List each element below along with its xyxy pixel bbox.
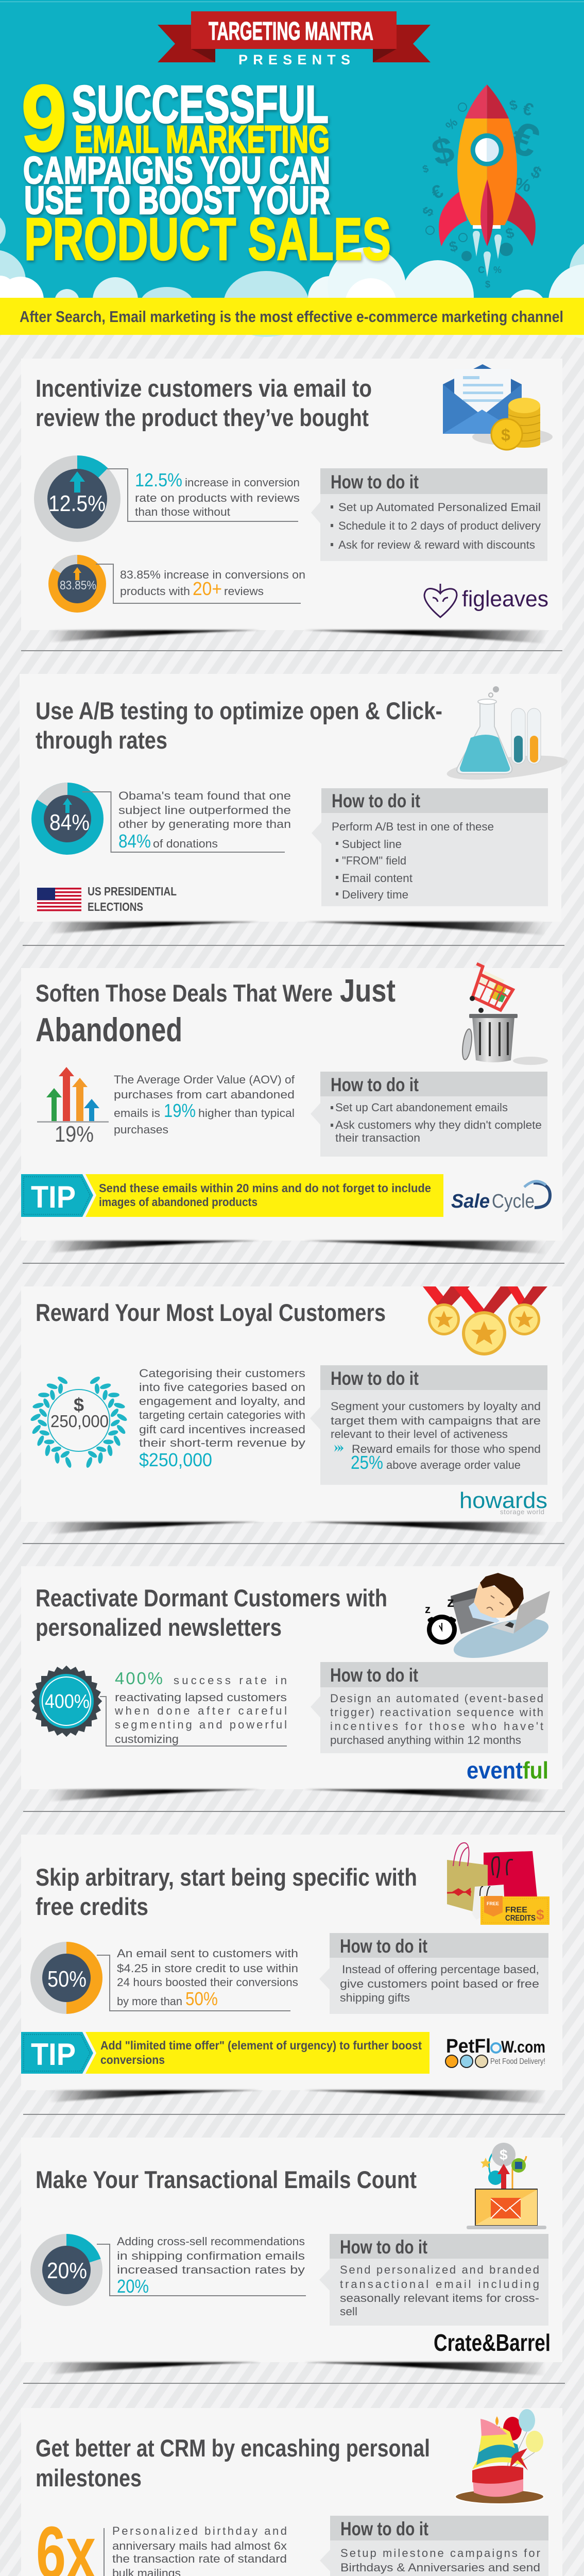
stat text: 84%: of donations bbox=[153, 837, 218, 850]
heading: Make Your Transactional Emails Count bbox=[36, 2166, 417, 2193]
how to do it: How to do it bbox=[340, 1936, 427, 1957]
panel 8: crm milestones bbox=[21, 2408, 562, 2576]
how to do it: give customers point based or free bbox=[340, 1977, 539, 1990]
stat: 83.85% donut bbox=[48, 555, 106, 613]
stat: 84% donut bbox=[31, 783, 104, 855]
how to do it: 25% bbox=[351, 1452, 383, 1473]
heading: Use A/B testing to optimize open & Click- bbox=[36, 697, 442, 724]
icon: shopping bags and coupon: FREE bbox=[505, 1906, 527, 1914]
how to do it bbox=[311, 468, 547, 561]
rocket background icons: $ bbox=[485, 279, 490, 290]
stat text: 83.85%: reviews bbox=[224, 585, 264, 598]
heading: Reactivate Dormant Customers with bbox=[36, 1584, 387, 1612]
tip bbox=[21, 1174, 443, 1217]
icon: shopping bags and coupon: CREDITS bbox=[505, 1914, 536, 1923]
logo: salecycle: Sale bbox=[451, 1191, 490, 1212]
how to do it bbox=[319, 2234, 548, 2326]
how to do it: purchased anything within 12 months bbox=[330, 1734, 521, 1747]
panel 5: dormant customers bbox=[21, 1566, 562, 1789]
badge: 400% bbox=[31, 1666, 102, 1737]
icon: cart in trash can bbox=[461, 964, 548, 1065]
logo: crate and barrel: Crate&Barrel bbox=[434, 2329, 551, 2356]
title bbox=[21, 65, 391, 273]
stat text: 12.5% bbox=[135, 469, 300, 518]
title: CAMPAIGNS YOU CAN bbox=[23, 149, 330, 192]
callout line bbox=[82, 792, 285, 852]
stat text: 50%: 24 hours boosted their conversions bbox=[117, 1976, 298, 1989]
heading bbox=[36, 375, 372, 431]
how to do it bbox=[319, 1933, 548, 2014]
stat text: 12.5%: than those without bbox=[135, 505, 230, 518]
laurel badge: $250,000: 250,000 bbox=[50, 1412, 109, 1431]
rocket background icons: C bbox=[478, 265, 485, 275]
how to do it: How to do it bbox=[331, 1368, 419, 1389]
stat text: 6x: anniversary mails had almost 6x bbox=[112, 2539, 287, 2552]
rocket background icons: % bbox=[513, 174, 532, 196]
how to do it: Perform A/B test in one of these bbox=[332, 820, 494, 833]
how to do it: their transaction bbox=[335, 1131, 420, 1144]
how to do it: Delivery time bbox=[342, 888, 408, 901]
how to do it: Schedule it to 2 days of product delivery bbox=[338, 519, 541, 532]
heading bbox=[36, 1863, 417, 1920]
tip: Add "limited time offer" (element of urgency) to further boost bbox=[100, 2039, 422, 2052]
stat text: 84%: subject line outperformed the bbox=[118, 804, 291, 817]
stat: 12.5% donut: 12.5% bbox=[48, 491, 106, 516]
how to do it: How to do it bbox=[330, 1665, 418, 1686]
how to do it: above average order value bbox=[386, 1459, 521, 1471]
badge: 400%: 400% bbox=[45, 1691, 90, 1713]
stat text: 50%: by more than bbox=[117, 1995, 182, 2008]
how to do it: Instead of offering percentage based, bbox=[342, 1963, 539, 1976]
tip: TIP bbox=[31, 1180, 76, 1214]
icon: rocket bbox=[439, 84, 536, 277]
panel shadow bbox=[49, 1789, 546, 1803]
divider line bbox=[104, 2528, 105, 2576]
heading: Get better at CRM by encashing personal bbox=[36, 2434, 430, 2462]
how to do it: How to do it bbox=[340, 2518, 428, 2539]
how to do it: trigger) reactivation sequence with bbox=[330, 1706, 543, 1719]
title: 9 bbox=[21, 65, 67, 171]
logo: salecycle: Cycle bbox=[492, 1191, 535, 1212]
rocket background icons: $ bbox=[448, 238, 459, 255]
ribbon: TARGETING MANTRA bbox=[209, 18, 373, 45]
logo: figleaves bbox=[424, 584, 548, 617]
laurel badge: $250,000 bbox=[29, 1375, 128, 1468]
how to do it: Segment your customers by loyalty and bbox=[331, 1400, 541, 1413]
panel 6: free credits bbox=[21, 1835, 562, 2090]
stat text: 20%: 20% bbox=[117, 2276, 149, 2297]
stat text: $250,000 bbox=[139, 1367, 305, 1470]
rocket background icons: $ bbox=[428, 129, 458, 174]
stat text: 12.5%: increase in conversion bbox=[185, 476, 300, 489]
tip: Send these emails within 20 mins and do not forget to include bbox=[99, 1181, 431, 1195]
how to do it: How to do it bbox=[332, 790, 420, 811]
heading: review the product they’ve bought bbox=[36, 404, 369, 431]
stat text: 50% bbox=[117, 1947, 298, 2009]
stat: 50% donut bbox=[30, 1942, 102, 2014]
stat: 20% donut: 20% bbox=[47, 2258, 87, 2283]
yellow subtitle band bbox=[0, 298, 584, 335]
stat: 20% donut bbox=[30, 2234, 102, 2306]
how to do it: Send personalized and branded bbox=[340, 2263, 539, 2276]
stat text: 6x bbox=[112, 2524, 287, 2576]
icon: envelope and coins: $ bbox=[501, 426, 510, 444]
how to do it: transactional email including bbox=[340, 2278, 539, 2291]
icon: shopping bags and coupon: FREE bbox=[487, 1901, 499, 1906]
panel 4: loyal customers bbox=[21, 1286, 562, 1522]
icon: laptop with email bbox=[467, 2143, 546, 2229]
logo: eventful: ful bbox=[523, 1757, 548, 1784]
stat text: 6x: Personalized birthday and bbox=[112, 2524, 287, 2537]
callout line bbox=[100, 1697, 287, 1746]
how to do it: Birthdays & Anniversaries and send bbox=[340, 2561, 540, 2574]
flag and label: US PRESIDENTIAL bbox=[88, 885, 177, 898]
how to do it: Ask customers why they didn't complete bbox=[335, 1118, 542, 1131]
tip: conversions bbox=[100, 2053, 165, 2066]
how to do it: Setup milestone campaigns for bbox=[340, 2547, 540, 2560]
rocket background icons bbox=[419, 96, 546, 290]
how to do it: target them with campaigns that are bbox=[331, 1414, 541, 1427]
stat text: 6x: the transaction rate of standard bbox=[112, 2552, 287, 2565]
stat text: 50%: $4.25 in store credit to use within bbox=[117, 1962, 298, 1975]
how to do it: How to do it bbox=[340, 2236, 427, 2258]
stat text: 19%: higher than typical bbox=[198, 1107, 295, 1120]
how to do it: seasonally relevant items for cross- bbox=[340, 2292, 539, 2304]
title: SUCCESSFUL bbox=[72, 75, 329, 134]
callout line bbox=[97, 1955, 290, 2011]
heading: Abandoned bbox=[36, 1011, 182, 1048]
icon: sleeping man and alarm clock: z bbox=[425, 1603, 431, 1616]
heading: Just bbox=[340, 973, 396, 1009]
rocket background icons: % bbox=[493, 265, 502, 275]
callout line bbox=[107, 469, 298, 521]
heading: Incentivize customers via email to bbox=[36, 375, 372, 402]
stat: 12.5% donut bbox=[34, 455, 121, 542]
stat text: 400%: customizing bbox=[115, 1733, 179, 1745]
how to do it: incentives for those who have't bbox=[330, 1720, 543, 1733]
how to do it: shipping gifts bbox=[340, 1991, 410, 2004]
presents: PRESENTS bbox=[238, 52, 350, 67]
icon: flask and tubes bbox=[446, 686, 569, 784]
stat text: 19%: 19% bbox=[164, 1100, 196, 1121]
icon: sleeping man and alarm clock bbox=[425, 1573, 553, 1666]
how to do it: "FROM" field bbox=[342, 854, 406, 867]
how to do it: How to do it bbox=[331, 1074, 419, 1095]
stat text: 50%: 50% bbox=[185, 1988, 218, 2009]
how to do it bbox=[312, 788, 548, 906]
heading bbox=[36, 697, 442, 754]
panel shadow bbox=[49, 1241, 546, 1254]
stat text: 84%: other by generating more than bbox=[118, 818, 291, 831]
stat text: $250,000: Categorising their customers bbox=[139, 1367, 305, 1380]
how to do it: Design an automated (event-based bbox=[330, 1692, 543, 1705]
icon: shopping bags and coupon bbox=[447, 1843, 549, 1925]
logo: petflow bbox=[445, 2036, 545, 2067]
icon: birthday cake and balloons bbox=[455, 2409, 544, 2504]
panel shadow bbox=[49, 922, 546, 935]
callout line bbox=[96, 564, 301, 603]
stat text: 84%: 84% bbox=[118, 831, 151, 852]
stat text: 50%: An email sent to customers with bbox=[117, 1947, 298, 1960]
how to do it: Set up Cart abandonement emails bbox=[335, 1101, 508, 1114]
logo: howards: howards bbox=[459, 1488, 547, 1513]
heading: Reward Your Most Loyal Customers bbox=[36, 1299, 386, 1326]
how to do it: Subject line bbox=[342, 838, 402, 851]
title: EMAIL MARKETING bbox=[75, 118, 330, 161]
rocket background icons: $ bbox=[528, 162, 544, 183]
panel shadow bbox=[49, 1522, 546, 1535]
title: PRODUCT SALES bbox=[24, 206, 391, 273]
panel 3: abandoned carts bbox=[21, 964, 562, 1241]
tip: images of abandoned products bbox=[99, 1195, 257, 1209]
heading bbox=[36, 973, 396, 1048]
rocket background icons: € bbox=[520, 98, 536, 120]
stat text: 20%: increased transaction rates by bbox=[117, 2263, 305, 2276]
how to do it bbox=[311, 1662, 548, 1753]
chart: four rising arrows bbox=[37, 1067, 109, 1147]
stat text: 400%: success rate in bbox=[174, 1674, 287, 1687]
rocket background icons: $ bbox=[419, 204, 437, 219]
logo: eventful: event bbox=[467, 1757, 523, 1784]
stat text: 83.85%: products with bbox=[120, 585, 190, 598]
panel shadow bbox=[49, 630, 546, 643]
ribbon bbox=[158, 11, 431, 62]
rocket background icons: € bbox=[504, 111, 546, 168]
stat text: 400%: reactivating lapsed customers bbox=[115, 1691, 287, 1704]
stat text: 400%: segmenting and powerful bbox=[115, 1718, 287, 1731]
stat text: $250,000: engagement and loyalty, and bbox=[139, 1395, 305, 1408]
tip: TIP bbox=[31, 2037, 76, 2072]
stat: 84% donut: 84% bbox=[49, 810, 90, 835]
icon: shopping bags and coupon: $ bbox=[536, 1907, 544, 1923]
how to do it: Set up Automated Personalized Email bbox=[338, 501, 541, 514]
stat text: 400%: when done after careful bbox=[114, 1704, 287, 1717]
heading: milestones bbox=[36, 2464, 142, 2492]
clouds bbox=[0, 212, 584, 338]
heading: Skip arbitrary, start being specific with bbox=[36, 1863, 417, 1891]
heading bbox=[36, 2434, 430, 2492]
title: USE TO BOOST YOUR bbox=[24, 179, 330, 223]
stat text: 20%: in shipping confirmation emails bbox=[117, 2249, 305, 2262]
rocket background icons: % bbox=[443, 115, 460, 133]
stat text: $250,000: into five categories based on bbox=[139, 1381, 305, 1394]
callout line bbox=[97, 2244, 306, 2296]
panel 7: transactional emails bbox=[21, 2138, 562, 2362]
stat text: 12.5%: 12.5% bbox=[135, 469, 182, 490]
how to do it bbox=[310, 1365, 547, 1485]
how to do it: relevant to their level of activeness bbox=[331, 1428, 508, 1440]
stat text: 400%: 400% bbox=[115, 1669, 163, 1688]
stat text: 84% bbox=[118, 789, 291, 852]
how to do it bbox=[320, 2516, 548, 2576]
header hero bbox=[0, 0, 584, 338]
logo: petflow: PetFl bbox=[446, 2036, 491, 2057]
logo: petflow: Pet Food Delivery! bbox=[490, 2057, 545, 2066]
stat text: $250,000: $250,000 bbox=[139, 1449, 212, 1470]
heading: Soften Those Deals That Were bbox=[36, 979, 333, 1007]
stat text: 83.85% bbox=[120, 568, 305, 599]
flag and label: ELECTIONS bbox=[88, 900, 143, 913]
logo: petflow: W.com bbox=[501, 2038, 545, 2056]
chart: four rising arrows: 19% bbox=[55, 1122, 94, 1147]
heading: personalized newsletters bbox=[36, 1614, 282, 1641]
stat text: 19% bbox=[114, 1073, 295, 1136]
rocket background icons: $ bbox=[508, 96, 519, 113]
stat: 83.85% donut: 83.85% bbox=[60, 579, 96, 592]
tip bbox=[21, 2032, 430, 2074]
flag and label bbox=[37, 885, 177, 913]
icon: envelope and coins bbox=[443, 364, 553, 450]
stat text: 20% bbox=[117, 2235, 305, 2297]
icon: laptop with email: $ bbox=[500, 2147, 508, 2163]
logo: howards: storage world bbox=[500, 1508, 544, 1516]
stat text: 19%: purchases from cart abandoned bbox=[114, 1088, 295, 1101]
how to do it: sell bbox=[340, 2305, 357, 2318]
stat text: $250,000: gift card incentives increased bbox=[139, 1423, 305, 1436]
panel 1: reviews bbox=[21, 359, 562, 630]
stat text: 19%: purchases bbox=[114, 1123, 168, 1136]
stat text: $250,000: their short-term revenue by bbox=[139, 1436, 305, 1449]
stat text: 83.85%: 83.85% increase in conversions on bbox=[120, 568, 305, 581]
stat text: $250,000: targeting certain categories with bbox=[139, 1409, 305, 1421]
icon: sleeping man and alarm clock: z bbox=[447, 1594, 454, 1610]
how to do it bbox=[311, 1072, 547, 1157]
how to do it: How to do it bbox=[331, 471, 419, 493]
stat text: 20%: Adding cross-sell recommendations bbox=[117, 2235, 305, 2248]
rocket background icons: $ bbox=[504, 224, 516, 242]
stat text: 12.5%: rate on products with reviews bbox=[135, 492, 300, 504]
panel shadow bbox=[49, 2090, 546, 2104]
stat text: 400% bbox=[114, 1669, 287, 1745]
heading bbox=[36, 1584, 387, 1641]
logo: figleaves: figleaves bbox=[462, 586, 548, 612]
laurel badge: $250,000: $ bbox=[74, 1394, 84, 1415]
logo: salecycle bbox=[451, 1181, 550, 1212]
stat text: 84%: Obama's team found that one bbox=[118, 789, 291, 802]
rocket background icons: € bbox=[428, 180, 446, 204]
stat: 50% donut: 50% bbox=[47, 1967, 87, 1992]
stat text: 83.85%: 20+ bbox=[193, 578, 222, 599]
panel 2: a/b testing bbox=[20, 674, 569, 922]
stat text: 19%: The Average Order Value (AOV) of bbox=[114, 1073, 295, 1086]
how to do it: Email content bbox=[342, 872, 413, 885]
panel shadow bbox=[49, 2362, 546, 2376]
heading: free credits bbox=[36, 1893, 148, 1920]
heading: through rates bbox=[36, 726, 167, 754]
rocket background icons: $ bbox=[421, 163, 430, 176]
stat text: 19%: emails is bbox=[114, 1107, 160, 1120]
how to do it: Reward emails for those who spend bbox=[352, 1443, 541, 1455]
how to do it: Ask for review & reward with discounts bbox=[338, 538, 535, 551]
icon: medals bbox=[423, 1286, 547, 1355]
